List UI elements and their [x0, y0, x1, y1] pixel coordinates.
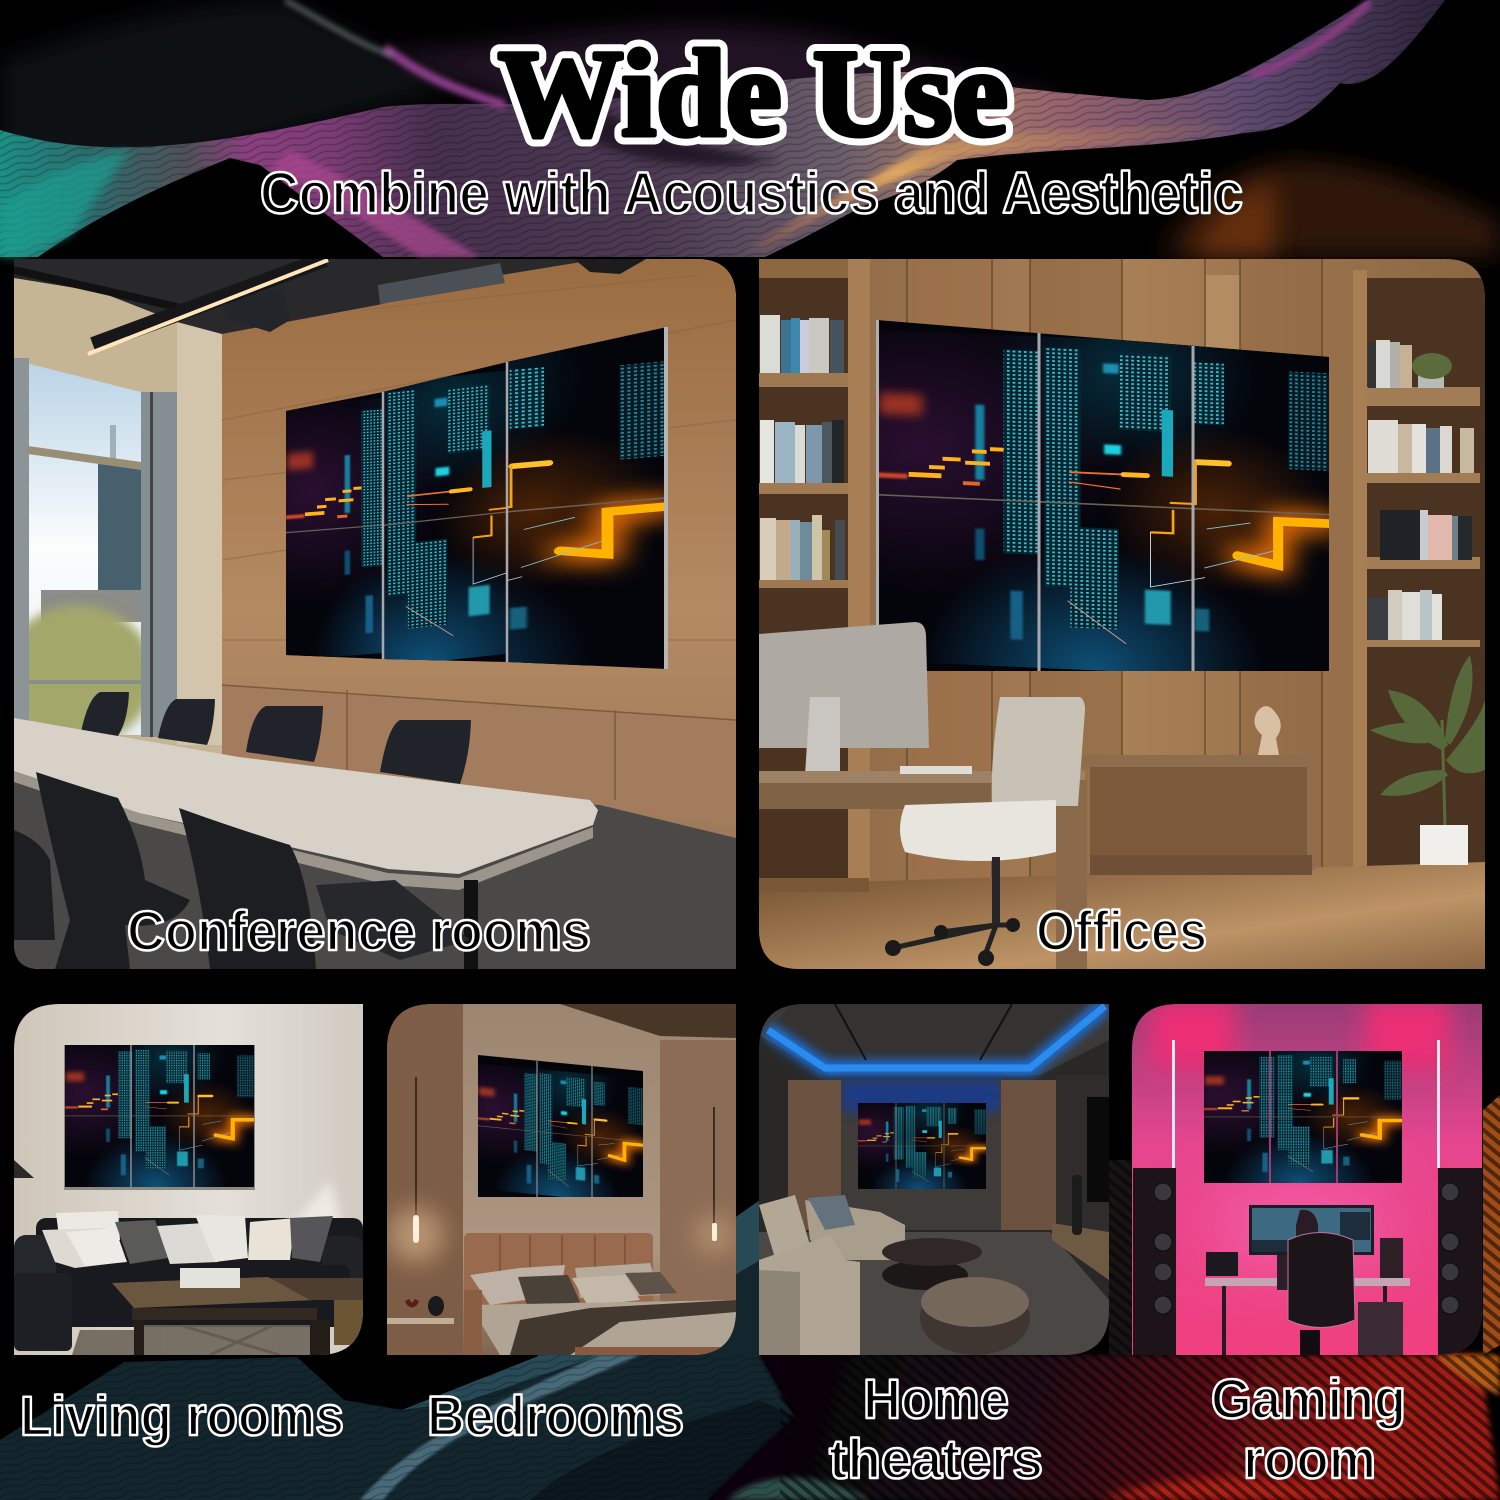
- floor: [759, 862, 1485, 969]
- conference table: [14, 718, 598, 970]
- window: [2, 358, 177, 745]
- subtitle: Combine with Acoustics and Aesthetic: [260, 161, 1243, 226]
- ceiling: [759, 1004, 1109, 1075]
- label: conference rooms: Conference rooms: [127, 899, 591, 962]
- wall art: [858, 1103, 986, 1189]
- left bookshelf: [759, 259, 870, 899]
- sofa: [759, 1195, 905, 1355]
- label: home theaters: Home: [863, 1367, 1009, 1430]
- wood planks: [907, 259, 1322, 880]
- back chairs: [81, 692, 471, 784]
- bed: [464, 1290, 736, 1355]
- bottom ribbons: [0, 1095, 1500, 1500]
- panel: gaming room: [1132, 1000, 1482, 1355]
- gaming monitor: [1249, 1205, 1374, 1255]
- rug: [72, 1325, 310, 1355]
- ceiling with ducts and linear light: [14, 259, 646, 354]
- pillows: [470, 1263, 677, 1308]
- top ribbon: [0, 0, 1500, 257]
- title: Wide Use: [498, 25, 1008, 162]
- office chair: [885, 697, 1085, 966]
- pillows: [42, 1211, 333, 1268]
- rug: [759, 1232, 1109, 1355]
- ottoman: [920, 1277, 1030, 1355]
- bust: [1254, 706, 1281, 755]
- wall art: [64, 1045, 255, 1190]
- desk: [1205, 1238, 1410, 1355]
- front chairs: [14, 772, 470, 969]
- panel: conference rooms: [2, 259, 736, 970]
- carpet floor: [14, 770, 736, 969]
- wall art: [1204, 1051, 1402, 1183]
- curtains: [788, 1080, 1056, 1230]
- label: bedrooms: Bedrooms: [427, 1384, 684, 1447]
- panel: home theaters: [759, 1004, 1109, 1355]
- label: living rooms: Living rooms: [20, 1384, 344, 1447]
- wood wall: [222, 259, 736, 840]
- right bookshelf: [1353, 270, 1485, 870]
- desk: [759, 766, 1087, 969]
- blue led cove: [768, 1004, 1105, 1068]
- gamer in chair: [1277, 1210, 1355, 1355]
- round table: [882, 1238, 982, 1290]
- monitor: [759, 622, 929, 786]
- speakers: [1133, 1168, 1482, 1355]
- coffee table: [112, 1268, 363, 1356]
- label: gaming room: [1211, 1367, 1406, 1490]
- bedside table: [387, 1296, 454, 1324]
- label: offices: Offices: [1036, 899, 1207, 962]
- headboard: [464, 1233, 653, 1305]
- plant: [1370, 655, 1485, 865]
- wall art: [870, 315, 1335, 681]
- panel: offices: [759, 259, 1485, 969]
- panel: living rooms: [14, 1004, 363, 1356]
- sunlight: [297, 1183, 342, 1218]
- pendant lights: [388, 1077, 734, 1263]
- lower wood shading: [1090, 767, 1307, 855]
- back wall: [841, 1080, 1001, 1230]
- label: gaming room: Gaming: [1211, 1367, 1406, 1430]
- neon tubes: [1172, 1040, 1440, 1168]
- panel: bedrooms: [387, 1004, 736, 1355]
- wall art: [286, 327, 668, 669]
- label: home theaters: [829, 1367, 1043, 1490]
- title: Wide Use: [498, 25, 1008, 162]
- floor lamp shade: [14, 1160, 34, 1178]
- sofa: [14, 1218, 363, 1351]
- label: gaming room: room: [1243, 1427, 1376, 1490]
- label: home theaters: theaters: [829, 1427, 1043, 1490]
- console shelf: [1082, 755, 1315, 875]
- ceiling: [560, 1004, 736, 1038]
- wall art: [478, 1055, 643, 1205]
